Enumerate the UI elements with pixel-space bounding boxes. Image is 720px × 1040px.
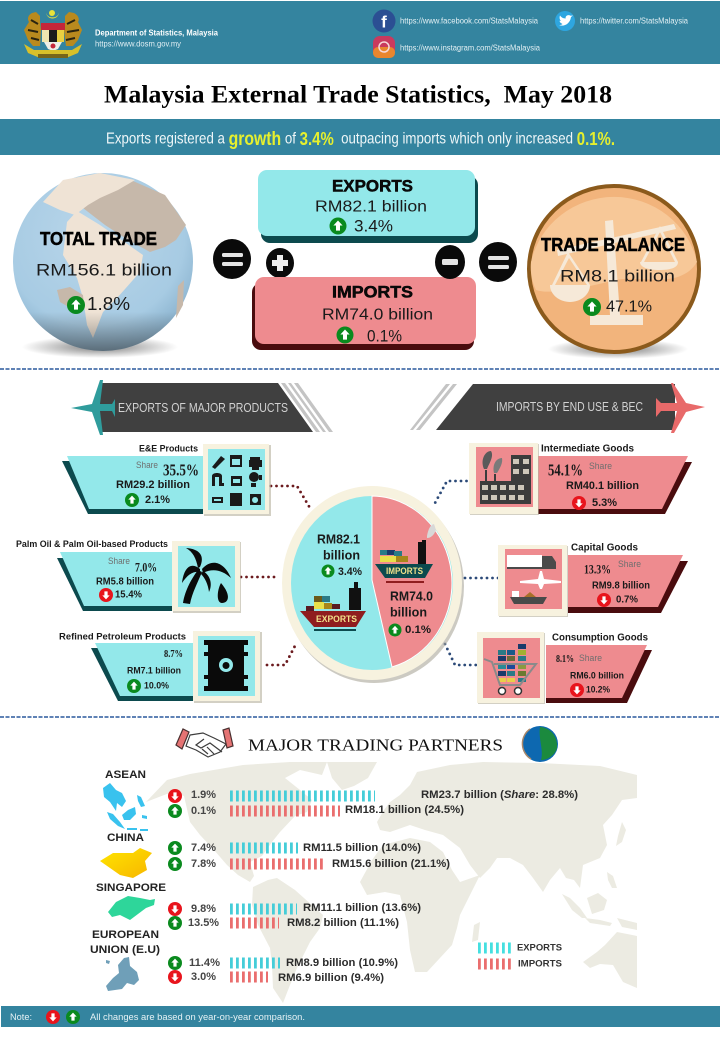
consumption change (570, 683, 610, 697)
panel: refined petroleum (59, 631, 262, 703)
icon: electronics (203, 444, 271, 516)
panel: exports (258, 170, 478, 243)
connector dots: right (435, 481, 499, 665)
operator: plus (266, 248, 294, 278)
icon: truck plane ship (498, 545, 568, 617)
icon: oil barrel (193, 631, 262, 703)
ASEAN changes (168, 789, 216, 818)
Singapore values: RM8.2 billion (11.1%) (287, 917, 399, 929)
exports banner label: EXPORTS OF MAJOR PRODUCTS (118, 401, 288, 415)
pie imports value: RM74.0 (390, 588, 433, 604)
pie slice: imports (372, 496, 452, 667)
Singapore changes: 13.5% (188, 917, 219, 929)
EU values: RM6.9 billion (9.4%) (278, 972, 384, 984)
Singapore changes (168, 902, 219, 930)
capital change (597, 593, 638, 607)
E&E share (136, 460, 199, 480)
E&E label: E&E Products (139, 444, 198, 454)
panel: consumption goods (477, 632, 652, 704)
consumption share (556, 653, 602, 665)
ASEAN values: RM23.7 billion (Share: 28.8%) (421, 789, 578, 801)
ASEAN label: ASEAN (105, 769, 146, 781)
exports ship label: EXPORTS (316, 614, 357, 624)
EU map (106, 957, 139, 991)
icon: national emblem (24, 10, 82, 58)
Singapore values: RM11.1 billion (13.6%) (303, 902, 421, 914)
E&E value: RM29.2 billion (116, 479, 190, 491)
imports change (336, 326, 402, 346)
palm oil change (99, 588, 142, 602)
panel: capital goods (498, 542, 688, 617)
pie imports value (390, 588, 433, 620)
China changes: 7.4% (191, 842, 216, 854)
ASEAN changes: 0.1% (191, 805, 216, 817)
icon: instagram (373, 36, 395, 58)
China label: CHINA (107, 832, 144, 844)
EU changes: 3.0% (191, 971, 216, 983)
ASEAN changes: 1.9% (191, 789, 216, 801)
exports heading: EXPORTS (332, 176, 413, 196)
panel: trade balance (529, 186, 699, 359)
icon: factory (469, 443, 539, 515)
exports change: 3.4% (354, 216, 393, 236)
icon: facebook (372, 10, 396, 32)
China map (100, 848, 152, 878)
operator: equals (213, 239, 251, 279)
organisation website: https://www.dosm.gov.my (95, 40, 181, 48)
exports value: RM82.1 billion (315, 198, 427, 216)
partner: China (100, 832, 450, 878)
intermediate share: Share (589, 461, 612, 471)
partner: Singapore (96, 882, 421, 930)
intermediate change (572, 496, 617, 510)
operator: minus (435, 245, 465, 279)
total trade change (67, 294, 130, 314)
EU label: EUROPEAN (92, 929, 159, 941)
headline sentence: Exports registered a growth of 3.4% outpacing imports which only increased 0.1%. (106, 128, 615, 150)
exports change (330, 216, 393, 236)
panel: imports (252, 277, 476, 350)
pie imports value: billion (390, 604, 427, 620)
intermediate change: 5.3% (592, 497, 617, 509)
Singapore bars (230, 909, 297, 923)
pie exports value: billion (323, 548, 360, 562)
China values (303, 842, 450, 870)
palm oil change: 15.4% (115, 590, 142, 600)
capital share: Share (618, 559, 641, 569)
headline band (0, 119, 720, 155)
icon: faded scales (550, 220, 678, 325)
capital value: RM9.8 billion (592, 580, 650, 592)
China changes (168, 841, 216, 871)
globe landmass (43, 173, 186, 338)
section title: major trading partners: MAJOR TRADING PARTNERS (248, 736, 503, 754)
palm oil share: Share (108, 556, 130, 566)
trade balance change: 47.1% (606, 298, 652, 316)
Singapore map (108, 896, 155, 920)
total trade change: 1.8% (87, 294, 130, 314)
panel: palm oil (16, 539, 241, 613)
E&E share: 35.5% (163, 460, 199, 480)
icon: small globe (522, 726, 558, 762)
banner: imports by end use (410, 383, 705, 433)
pie exports change (322, 564, 362, 578)
legend imports: IMPORTS (518, 958, 562, 970)
China values: RM11.5 billion (14.0%) (303, 842, 421, 854)
panel: intermediate goods (469, 443, 692, 515)
icon: facebook: f (381, 12, 387, 32)
trade balance heading: TRADE BALANCE (541, 235, 685, 255)
panel: total trade globe (13, 173, 193, 358)
ASEAN values: RM18.1 billion (24.5%) (345, 804, 464, 816)
total trade value: RM156.1 billion (36, 260, 172, 280)
world map background (146, 762, 637, 1003)
organisation name: Department of Statistics, Malaysia (95, 28, 219, 38)
note text: All changes are based on year-on-year comparison. (90, 1012, 305, 1022)
imports heading: IMPORTS (332, 282, 413, 302)
pie exports change: 3.4% (338, 566, 362, 578)
palm oil share: 7.0% (135, 560, 157, 574)
imports ship label: IMPORTS (386, 566, 423, 576)
intermediate label: Intermediate Goods (541, 444, 634, 454)
pie exports value (317, 532, 360, 562)
EU label (90, 929, 160, 956)
EU values (278, 957, 398, 984)
China bars (230, 848, 326, 864)
consumption share: Share (579, 653, 602, 663)
header bar (0, 1, 720, 64)
E&E change (125, 493, 170, 507)
icon: twitter (555, 11, 575, 31)
EU changes (168, 956, 220, 984)
EU bars (230, 963, 280, 977)
partner: ASEAN (103, 769, 578, 831)
ASEAN map (103, 783, 148, 831)
trade balance change (583, 298, 652, 316)
icon: exports ship (300, 582, 366, 631)
E&E share: Share (136, 460, 158, 470)
icon: teal plane (71, 380, 115, 435)
intermediate share: 54.1% (548, 460, 583, 480)
E&E change: 2.1% (145, 494, 170, 506)
imports change: 0.1% (367, 326, 402, 346)
ASEAN values (345, 789, 578, 816)
consumption label: Consumption Goods (552, 632, 648, 644)
banner: exports of major products (71, 380, 333, 435)
palm oil label: Palm Oil & Palm Oil-based Products (16, 539, 168, 549)
facebook link: https://www.facebook.com/StatsMalaysia (400, 16, 539, 26)
icon: palm tree (172, 541, 241, 613)
Singapore changes: 9.8% (191, 903, 216, 915)
palm oil share (108, 556, 157, 574)
pie imports change: 0.1% (405, 624, 431, 636)
capital change: 0.7% (616, 594, 638, 606)
trade balance value: RM8.1 billion (560, 266, 675, 286)
legend (478, 942, 562, 970)
petroleum value: RM7.1 billion (127, 666, 181, 676)
ASEAN bars (230, 796, 375, 811)
icon: handshake (176, 728, 233, 757)
EU changes: 11.4% (189, 957, 220, 969)
icon: imports ship (375, 524, 436, 583)
consumption change: 10.2% (586, 684, 610, 696)
intermediate value: RM40.1 billion (566, 480, 639, 492)
imports value: RM74.0 billion (322, 306, 433, 324)
panel: E&E products (62, 444, 271, 516)
icon: red plane (656, 383, 705, 433)
petroleum label: Refined Petroleum Products (59, 632, 186, 642)
partner: European Union (90, 929, 398, 991)
Singapore values (287, 902, 421, 929)
capital label: Capital Goods (571, 542, 638, 554)
note label: Note: (10, 1012, 32, 1022)
title: Malaysia External Trade Statistics, May 2018 (104, 82, 612, 108)
panel: central pie (282, 486, 464, 683)
pie exports value: RM82.1 (317, 532, 360, 546)
consumption share: 8.1% (556, 653, 574, 665)
palm oil value: RM5.8 billion (96, 576, 154, 588)
footer note (1, 1006, 720, 1027)
icon: shopping cart (477, 632, 545, 704)
legend exports: EXPORTS (517, 942, 562, 954)
twitter link: https://twitter.com/StatsMalaysia (580, 16, 689, 26)
operator: equals (479, 242, 517, 282)
pie imports change (388, 624, 431, 636)
consumption value: RM6.0 billion (570, 670, 624, 682)
imports banner label: IMPORTS BY END USE & BEC (496, 400, 643, 414)
total trade heading: TOTAL TRADE (40, 229, 157, 249)
capital share: 13.3% (584, 562, 611, 576)
China values: RM15.6 billion (21.1%) (332, 858, 450, 870)
petroleum share: 8.7% (164, 648, 183, 660)
petroleum change (127, 679, 170, 693)
instagram link: https://www.instagram.com/StatsMalaysia (400, 44, 541, 52)
China changes: 7.8% (191, 858, 216, 870)
capital share (584, 559, 641, 576)
petroleum change: 10.0% (144, 680, 170, 692)
note arrows (46, 1010, 80, 1024)
EU values: RM8.9 billion (10.9%) (286, 957, 398, 969)
Singapore label: SINGAPORE (96, 882, 166, 894)
connector dots: left (241, 486, 310, 665)
EU label: UNION (E.U) (90, 944, 160, 956)
